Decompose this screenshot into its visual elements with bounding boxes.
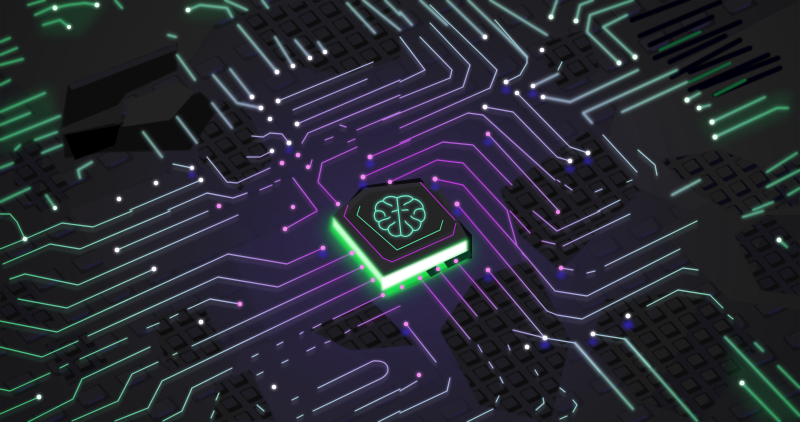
chip glowing right edge <box>381 238 468 298</box>
chip top face <box>333 182 468 275</box>
blue reflections under pad dots <box>189 87 633 348</box>
chip underside pads <box>426 250 472 277</box>
black connector block, upper left <box>60 42 218 160</box>
traces: upper right quadrant <box>400 5 698 319</box>
heat-sink bars, upper right <box>632 0 780 95</box>
traces: lower left quadrant <box>0 211 400 422</box>
chip socket shadow <box>332 178 472 290</box>
chip inner plate <box>344 186 458 261</box>
brain icon <box>374 196 425 236</box>
traces: lower right quadrant <box>400 211 733 422</box>
pad dots: magenta near the chip <box>217 132 563 377</box>
chip green halo <box>335 222 467 284</box>
pad dots: white mid-range <box>115 35 631 389</box>
chip glowing left edge <box>330 215 385 294</box>
chip magenta outline <box>344 182 456 262</box>
traces: upper left quadrant <box>130 62 517 246</box>
chip green inner outline <box>357 206 443 250</box>
chip package <box>330 178 472 298</box>
